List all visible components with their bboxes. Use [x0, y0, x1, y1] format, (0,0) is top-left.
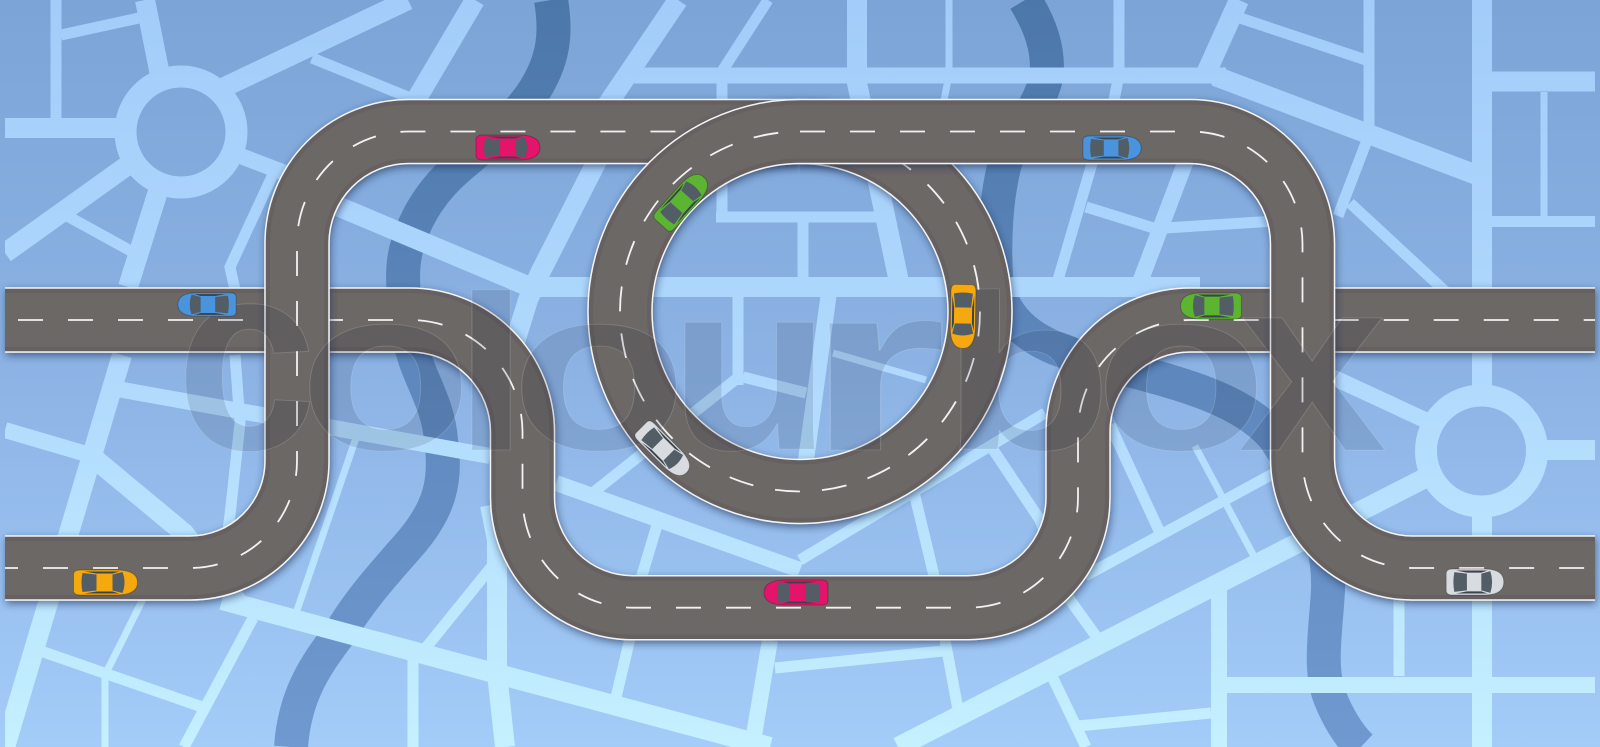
car: white, on loop [633, 419, 695, 481]
watermark: colourbox: o [510, 239, 688, 498]
watermark: colourbox: u [668, 232, 832, 500]
watermark: colourbox: l [452, 251, 530, 497]
watermark: colourbox: r [805, 233, 947, 501]
road: central loop [620, 132, 980, 492]
road: top and right arc [800, 132, 1595, 568]
watermark: colourbox [176, 205, 1388, 507]
road: left arc leading to top [5, 132, 800, 568]
roundabout: north-west [126, 76, 236, 188]
watermark: colourbox: o [299, 240, 473, 499]
car: blue, top right road [1083, 136, 1141, 160]
watermark: colourbox: b [942, 250, 1113, 496]
car: green, on loop [652, 169, 713, 233]
car: yellow, on loop [950, 284, 976, 349]
car: green, right road [1181, 293, 1241, 319]
car: pink, bottom road [764, 580, 828, 605]
river: west [291, 0, 554, 747]
watermark: colourbox: c [176, 205, 317, 507]
watermark: colourbox: x [1238, 224, 1388, 503]
car: white, bottom right road [1446, 569, 1504, 595]
road: winding middle road [5, 320, 1595, 608]
car: blue, left road [178, 293, 236, 316]
roundabout: south-east [1426, 396, 1537, 506]
river: east [995, 0, 1361, 747]
car: yellow, bottom left road [74, 570, 138, 595]
car: pink, top road [476, 135, 540, 160]
watermark: colourbox: o [1095, 239, 1268, 498]
